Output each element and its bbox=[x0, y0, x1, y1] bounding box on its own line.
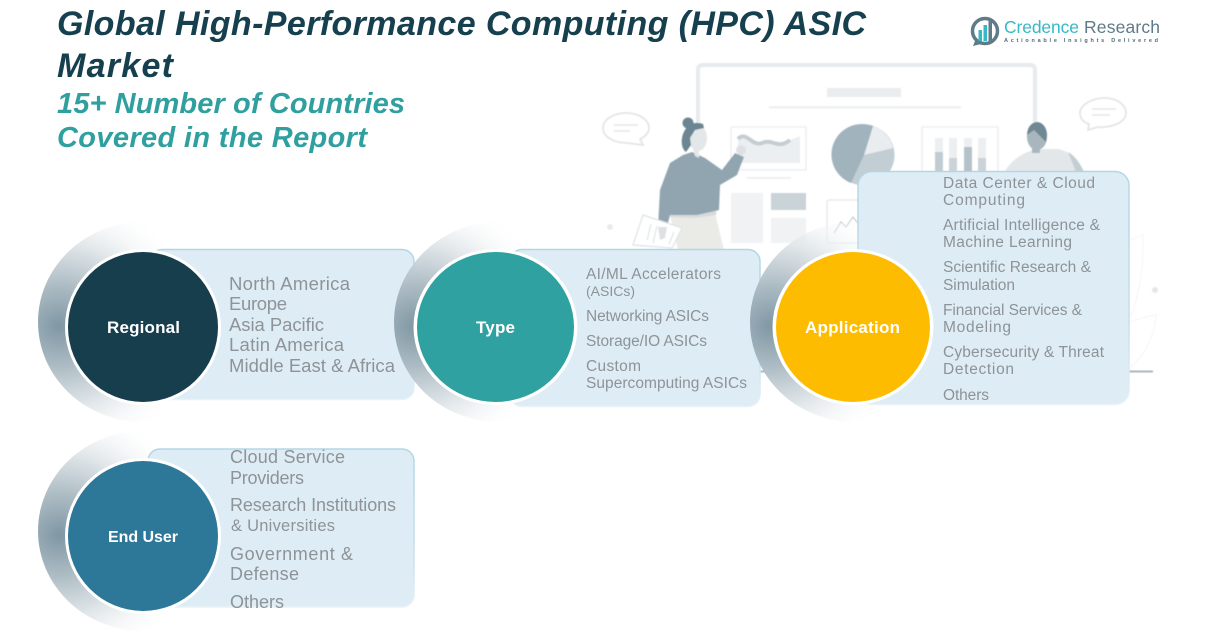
end user items: Research Institutions bbox=[230, 495, 396, 515]
regional items: Europe bbox=[229, 293, 287, 314]
application items: Machine Learning bbox=[943, 234, 1072, 251]
baseline bbox=[760, 370, 1153, 372]
type items: (ASICs) bbox=[586, 283, 635, 299]
end user items: Government & bbox=[230, 544, 353, 564]
regional backdrop ring bbox=[38, 222, 248, 422]
icon: man presenter bbox=[1005, 122, 1084, 172]
logo: Credence Research: Actionable Insights Delivered bbox=[1004, 38, 1158, 44]
application backdrop ring bbox=[750, 222, 960, 422]
application list panel bbox=[858, 172, 1129, 404]
end user items: Others bbox=[230, 592, 284, 612]
application items: Simulation bbox=[943, 277, 1015, 294]
application items: Detection bbox=[943, 361, 1014, 378]
icon: area chart card bbox=[731, 127, 806, 170]
application items: Financial Services & bbox=[943, 302, 1083, 319]
regional list panel bbox=[150, 250, 414, 400]
title: Global High-Performance Computing (HPC) ASIC bbox=[57, 5, 866, 43]
subtitle: 15+ Number of Countries bbox=[57, 88, 405, 120]
logo: Credence Research: Credence bbox=[1004, 17, 1079, 37]
type items: Storage/IO ASICs bbox=[586, 333, 707, 350]
type items: Custom bbox=[586, 358, 641, 375]
application items: Computing bbox=[943, 192, 1025, 209]
regional items bbox=[229, 273, 396, 376]
end user items: Cloud Service bbox=[230, 447, 345, 467]
type circle badge: Type bbox=[476, 318, 515, 337]
regional items: Asia Pacific bbox=[229, 314, 324, 335]
application items bbox=[943, 175, 1105, 404]
type backdrop ring bbox=[394, 222, 604, 422]
icon: presentation screen bbox=[698, 65, 1035, 128]
regional circle badge: Regional bbox=[107, 318, 180, 337]
end user list panel bbox=[148, 449, 414, 607]
panel: type bbox=[394, 222, 760, 422]
regional circle badge bbox=[65, 249, 221, 405]
icon: right speech bubble bbox=[1080, 98, 1126, 130]
application items: Scientific Research & bbox=[943, 259, 1092, 276]
panel: end user bbox=[38, 431, 414, 631]
logo: Credence Research: Research bbox=[1084, 17, 1160, 37]
illustration: presenters with dashboard bbox=[603, 65, 1158, 372]
icon: small line chart card bbox=[827, 200, 867, 243]
type items bbox=[586, 266, 747, 392]
icon: woman presenter bbox=[633, 118, 746, 250]
application items: Artificial Intelligence & bbox=[943, 217, 1101, 234]
application circle badge bbox=[772, 249, 934, 405]
type list panel bbox=[510, 250, 760, 406]
type circle badge bbox=[414, 249, 578, 405]
end user items: Defense bbox=[230, 564, 299, 584]
application items: Others bbox=[943, 387, 989, 404]
application items: Data Center & Cloud bbox=[943, 175, 1095, 192]
end user backdrop ring bbox=[38, 431, 248, 631]
end user items bbox=[230, 447, 396, 612]
regional items: Latin America bbox=[229, 334, 345, 355]
type items: Supercomputing ASICs bbox=[586, 375, 747, 392]
type items: AI/ML Accelerators bbox=[586, 266, 721, 283]
panel: application bbox=[750, 172, 1129, 422]
subtitle: Covered in the Report bbox=[57, 122, 368, 154]
icon: left speech bubble bbox=[603, 113, 649, 145]
logo: Credence Research bbox=[972, 17, 1160, 46]
regional items: Middle East & Africa bbox=[229, 355, 396, 376]
application items: Modeling bbox=[943, 319, 1011, 336]
application circle badge: Application bbox=[805, 318, 900, 337]
subtitle bbox=[57, 88, 405, 154]
icon: layout blocks bbox=[731, 177, 806, 243]
title bbox=[57, 5, 866, 85]
decorative plant and dots bbox=[607, 224, 1158, 368]
panel: regional bbox=[38, 222, 414, 422]
end user items: Providers bbox=[230, 468, 304, 488]
type items: Networking ASICs bbox=[586, 308, 709, 325]
icon: logo mark bbox=[972, 18, 998, 46]
end user items: & Universities bbox=[231, 517, 335, 535]
regional items: North America bbox=[229, 273, 351, 294]
icon: bar chart card bbox=[922, 127, 998, 177]
icon: pie chart bbox=[831, 124, 894, 186]
end user circle badge: End User bbox=[108, 529, 178, 546]
end user circle badge bbox=[65, 458, 221, 614]
application items: Cybersecurity & Threat bbox=[943, 344, 1105, 361]
title: Market bbox=[57, 47, 175, 85]
